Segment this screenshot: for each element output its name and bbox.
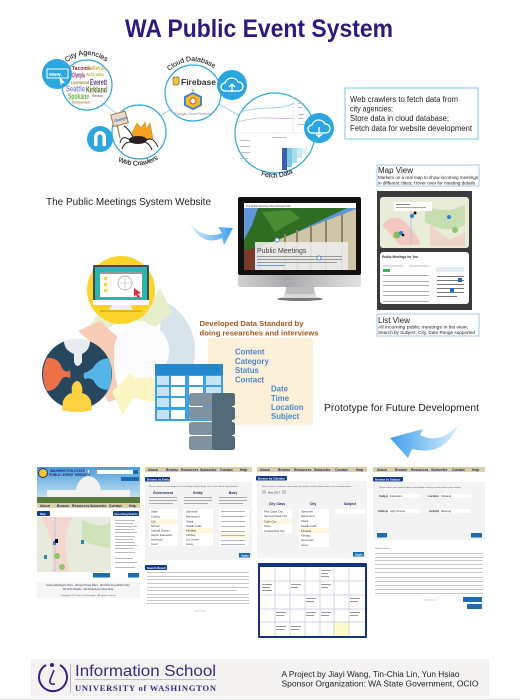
prototype: browse by subject: Subject: xyxy=(379,494,390,498)
city agencies node: Sammamish xyxy=(72,100,90,104)
list view callout xyxy=(377,314,479,336)
data standard panel: Time xyxy=(271,394,290,403)
prototype: browse by entity: Help xyxy=(240,468,247,472)
map view callout: Markers on a real map to show incoming meetings xyxy=(378,175,479,180)
project credits: A Project by Jiayi Wang, Tin-Chia Lin, Yun Hsiao xyxy=(282,670,460,679)
cloud database node: Firebase xyxy=(181,77,216,87)
prototype: browse by subject: Please select your desired subject and subtopic, and the results will be shown below. xyxy=(379,486,462,489)
data standard heading: doing researches and interviews xyxy=(200,328,318,338)
prototype: browse by calendar: Resources xyxy=(294,468,311,472)
prototype: browse by subject: Subtopic: xyxy=(378,509,391,513)
prototype: browse by calendar: About xyxy=(260,468,271,472)
logo: information school: Information School xyxy=(75,663,216,680)
map view callout xyxy=(377,165,479,186)
prototype: browse by subject: Help xyxy=(472,468,479,472)
prototype: browse by calendar: Lia Center xyxy=(301,538,314,542)
icon: www browser: www. xyxy=(48,72,62,78)
cloud database node: Google Cloud Platform xyxy=(175,112,211,116)
title: WA Public Event System xyxy=(125,15,393,43)
prototype: browse by entity: City xyxy=(151,520,156,524)
website heading: The Public Meetings System Website xyxy=(46,196,211,208)
prototype: home page: Copyright 2017 State of Washington · All rights reserved xyxy=(61,594,116,597)
prototype: browse by entity xyxy=(145,467,252,612)
prototype: home page: Map xyxy=(40,512,46,516)
pipeline description box xyxy=(345,88,478,139)
prototype: browse by entity: Please select a Government, then the Entity, and the Body. The results will be shown below. xyxy=(149,485,238,488)
calendar view xyxy=(258,563,367,638)
prototype: home page: Help xyxy=(129,504,136,508)
data standard panel: Category xyxy=(235,357,269,366)
monitor: public meetings website: The Public Meetings About Browse Help xyxy=(246,205,291,208)
prototype: browse by calendar xyxy=(256,467,367,558)
arrow: to prototypes xyxy=(390,425,458,458)
prototype: browse by subject: Kirkland xyxy=(441,494,452,498)
prototype: home page: WA OCIO Website · WA Public Event Home Shop xyxy=(63,588,114,591)
data standard heading xyxy=(200,319,318,338)
prototype: browse by entity: Kirkbay xyxy=(186,533,196,537)
prototype: browse by entity: Browse xyxy=(166,468,178,472)
city agencies node: Tacoma xyxy=(72,66,91,72)
web crawlers node xyxy=(87,104,167,166)
project credits xyxy=(282,670,478,688)
prototype: browse by calendar: Second Class City xyxy=(264,514,287,518)
prototype: browse by entity: Rainmount xyxy=(186,514,200,518)
monitor: public meetings website xyxy=(238,197,361,301)
prototype: browse by subject: Meeting xyxy=(441,509,451,513)
fetch data node xyxy=(234,92,334,178)
prototype: browse by entity: Lacey xyxy=(186,542,194,546)
prototype: browse by subject: Browse by Subject xyxy=(375,478,400,482)
prototype: home page: Resources xyxy=(72,504,89,508)
data standard panel: Location xyxy=(271,403,304,412)
prototype: browse by entity: Higher Education xyxy=(151,533,173,537)
data standard panel xyxy=(208,338,313,425)
web crawlers node: Google xyxy=(114,115,129,123)
prototype: browse by entity: Lia Center xyxy=(186,538,199,542)
prototype: browse by entity: About xyxy=(148,468,159,472)
prototype: browse by subject: Browse xyxy=(395,468,407,472)
prototype: home page: WASHINGTON STATE xyxy=(50,469,86,473)
prototype: browse by calendar: Rainmount xyxy=(301,514,315,518)
prototype: browse by subject: Total 18 results xyxy=(375,547,391,550)
pipeline description box: city agencies; xyxy=(350,104,393,114)
city agencies node: Renton xyxy=(92,94,103,98)
data standard panel: Status xyxy=(235,366,259,375)
prototype: browse by calendar: Town xyxy=(264,524,271,528)
label: fetch data: Fetch Data xyxy=(261,170,293,178)
prototype: browse by entity: Government xyxy=(153,491,174,495)
icon: computer on yellow circle xyxy=(87,256,155,324)
prototype: browse by subject: High School xyxy=(390,509,405,513)
city agencies node: Bellevue xyxy=(87,65,106,72)
prototype: browse by calendar: Kirkland xyxy=(301,529,312,533)
prototype: browse by calendar: Please select a calendar month and city, and the results will be shown in the calendar below. xyxy=(262,485,352,488)
prototype: browse by calendar: May 2017 xyxy=(268,490,281,494)
city agencies node: Walla Walla xyxy=(86,72,104,77)
icon: cloud upload xyxy=(217,70,247,100)
icon: team puzzle circle xyxy=(42,338,112,412)
data standard heading: Developed Data Standard by xyxy=(200,319,304,328)
prototype: browse by subject xyxy=(373,467,485,609)
prototype: browse by entity: Special District xyxy=(151,528,170,532)
prototype: browse by subject: Contact xyxy=(452,468,465,472)
pipeline description box: Web crawlers to fetch data from xyxy=(350,95,458,104)
prototype: browse by calendar: Unclassified City xyxy=(264,529,285,533)
prototype: browse by calendar: Code City xyxy=(264,520,277,524)
list view screenshot: Public Meetings for You xyxy=(382,255,418,259)
prototype: browse by entity: Contact xyxy=(220,468,233,472)
prototype: browse by entity: Apply xyxy=(241,554,249,558)
label: city agencies: City Agencies xyxy=(65,50,108,62)
label: cloud database: Cloud Database xyxy=(167,56,216,70)
map view callout: in different cities; Hover over for meeting details xyxy=(378,180,476,186)
city agencies node: Seattle xyxy=(66,84,85,94)
prototype: browse by calendar: City Class xyxy=(269,502,285,506)
prototype: home page: Contact xyxy=(109,504,122,508)
city agencies node: Spokane xyxy=(68,92,89,101)
footer bar xyxy=(0,659,520,700)
prototype: browse by calendar: Contact xyxy=(335,468,348,472)
prototype: browse by calendar: First Class City xyxy=(264,510,283,514)
prototype: browse by entity: Body xyxy=(229,491,237,495)
pipeline diagram xyxy=(42,50,334,178)
prototype: browse by calendar: City xyxy=(310,502,316,506)
list view callout: All incoming public meetings in list view; xyxy=(378,324,468,330)
prototype: browse by entity: Sammish xyxy=(186,510,198,514)
cloud database node xyxy=(164,56,247,122)
data standard panel: Subject xyxy=(271,412,300,421)
label: web crawlers: Web Crawlers xyxy=(119,156,158,166)
prototype: home page xyxy=(37,467,140,598)
monitor: public meetings website: Public Meetings xyxy=(257,248,307,255)
prototype: browse by calendar: Lacey xyxy=(301,543,309,547)
prototype: browse by entity: Interlocal xyxy=(151,538,163,542)
prototype: browse by entity: Subscribe xyxy=(200,468,217,472)
pipeline description box: Fetch data for website development xyxy=(350,124,473,133)
prototype: browse by calendar: Apply xyxy=(355,552,363,556)
prototype: browse by subject: About xyxy=(377,468,388,472)
data standard panel: Date xyxy=(271,384,289,394)
list view callout: Search by Subject, City, Date Range supported xyxy=(378,330,476,335)
icon: data table xyxy=(155,364,223,421)
prototype: home page: Subscribe xyxy=(90,504,107,508)
arrow: to website xyxy=(190,224,233,245)
prototype: browse by entity: Search Result xyxy=(147,566,166,570)
map view screenshot xyxy=(380,197,469,248)
prototype: browse by entity: Seattle Falls xyxy=(186,524,202,528)
city agencies node: Kirkland xyxy=(86,86,107,94)
city agencies node xyxy=(42,50,113,111)
prototype: browse by calendar: Subject xyxy=(344,502,357,506)
prototype: browse by calendar: Shark xyxy=(301,519,309,523)
prototype: browse by subject: Location: xyxy=(428,494,441,498)
list view callout: List View xyxy=(378,316,410,325)
icon: database stack xyxy=(189,393,235,450)
development cycle xyxy=(42,256,195,415)
prototype: browse by entity: County xyxy=(151,514,160,518)
prototype: home page: Access Washington Home · WA.gov Privacy Policy · WA OCIO Accessibility Policy xyxy=(46,584,131,587)
prototype: browse by calendar: Kirkbay xyxy=(301,534,311,538)
map view callout: Map View xyxy=(378,166,413,175)
prototype: browse by entity: School xyxy=(151,524,160,528)
prototype: browse by entity: Browse by Entity xyxy=(147,478,170,482)
city agencies node: Olympia xyxy=(72,70,85,80)
prototype: browse by entity: Entity xyxy=(193,491,203,495)
map and list screenshots xyxy=(377,191,472,310)
cloud database node: + xyxy=(192,88,195,94)
prototype: browse by calendar: Browse xyxy=(278,468,290,472)
prototype: home page: Upcoming Events xyxy=(114,512,138,516)
city agencies node: Lynnwood xyxy=(71,80,89,85)
logo: information school: UNIVERSITY of WASHINGTON xyxy=(75,683,217,693)
logo: information school xyxy=(39,663,217,693)
prototype: browse by subject: Education xyxy=(390,494,403,498)
prototype: home page: About xyxy=(40,504,51,508)
prototype: browse by entity: Resources xyxy=(181,468,198,472)
prototype: browse by subject: Activity: xyxy=(429,509,440,513)
prototype: browse by entity: State xyxy=(151,510,158,514)
pipeline description box: Store data in cloud database; xyxy=(350,114,449,123)
project credits: Sponsor Organization: WA State Government, OCIO xyxy=(282,680,478,688)
prototype: home page: Browse xyxy=(57,504,69,508)
prototype: browse by calendar: Subscribe xyxy=(314,468,331,472)
prototype: browse by entity: Court xyxy=(151,542,158,546)
icon: magnet xyxy=(87,126,113,152)
prototype: browse by subject: Resources xyxy=(411,468,428,472)
icon: cloud download xyxy=(304,113,334,143)
data standard panel: Contact xyxy=(235,376,264,384)
prototype: browse by calendar: Seattle Falls xyxy=(301,524,317,528)
prototype: browse by calendar: Browse by Calendar xyxy=(258,476,286,480)
prototype: home page: PUBLIC EVENT WEBSITE xyxy=(49,473,91,477)
prototype: browse by entity: Kirkland xyxy=(186,528,197,532)
prototype: browse by calendar: Help xyxy=(356,468,363,472)
city agencies node: Everett xyxy=(90,78,107,87)
prototype: browse by subject: Subscribe xyxy=(431,468,448,472)
prototype: browse by entity: Shark xyxy=(186,520,194,524)
prototype: browse by calendar: Sammish xyxy=(301,510,313,514)
data standard panel: Content xyxy=(235,348,265,356)
prototype heading: Prototype for Future Development xyxy=(324,403,479,414)
